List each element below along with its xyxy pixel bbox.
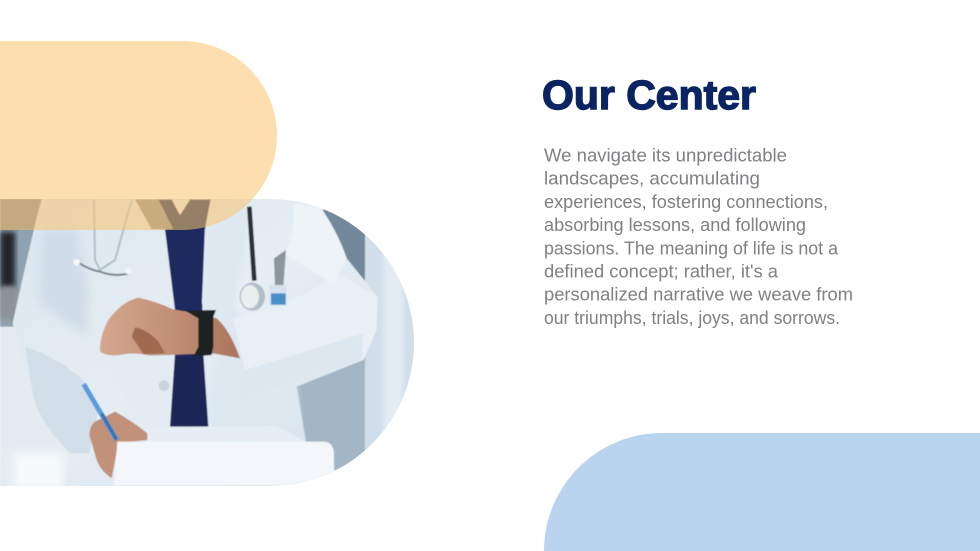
text block: description paragraph: absorbing lessons, and following	[544, 215, 806, 235]
shape: blue rounded corner block	[544, 433, 980, 551]
text block: description paragraph: We navigate its unpredictable	[544, 146, 787, 166]
text block: description paragraph: passions. The meaning of life is not a	[544, 238, 839, 258]
title: Our Center	[542, 72, 756, 118]
text block: description paragraph: landscapes, accumulating	[544, 169, 760, 189]
photo: doctor checking wristwatch	[0, 190, 422, 490]
shape: translucent peach pill	[0, 41, 277, 230]
text block: description paragraph: our triumphs, trials, joys, and sorrows.	[544, 308, 840, 328]
text block: description paragraph: defined concept; rather, it's a	[544, 262, 779, 282]
text block: description paragraph	[544, 146, 853, 328]
scrub V neck under the peach band	[158, 199, 211, 229]
text block: description paragraph: personalized narrative we weave from	[544, 285, 853, 305]
text block: description paragraph: experiences, fostering connections,	[544, 192, 828, 212]
